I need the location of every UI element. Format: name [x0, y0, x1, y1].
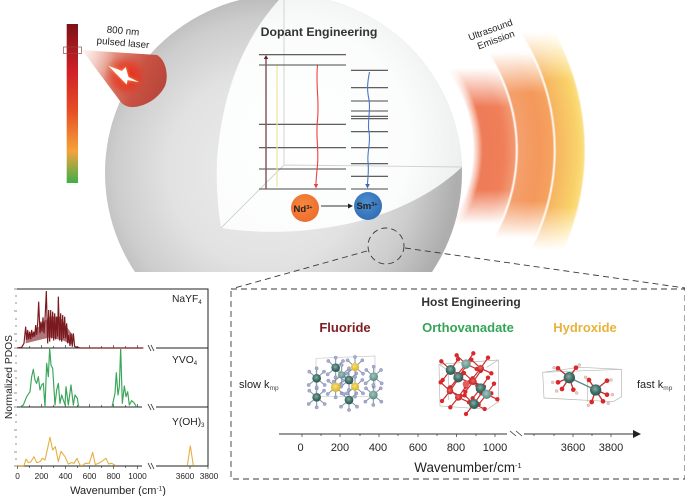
laser label — [96, 25, 150, 51]
PDOS chart — [4, 289, 219, 496]
laser label: 800 nm — [106, 25, 140, 38]
energy levels: Sm — [351, 70, 388, 189]
chart frame — [14, 289, 208, 469]
Y(OH)3 trace — [17, 437, 193, 466]
host engineering panel — [231, 289, 685, 479]
laser label: pulsed laser — [96, 36, 150, 51]
host class labels — [319, 320, 617, 335]
excitation arrow — [264, 55, 268, 189]
axis tick labels: 3800 — [599, 442, 623, 454]
red wavy relaxation arrow — [314, 66, 318, 188]
compound labels: Y(OH) — [172, 417, 201, 428]
sphere — [105, 0, 462, 272]
Sm ion: Sm — [356, 201, 371, 212]
x tick labels: 200 — [35, 471, 49, 481]
axis tick labels: 800 — [447, 442, 465, 454]
slow label: slow k — [239, 379, 270, 391]
wavenumber axis — [279, 430, 641, 475]
yellow transition — [276, 66, 278, 187]
ultrasound emission waves — [466, 20, 570, 280]
orthovanadate crystal — [438, 351, 499, 416]
fast label: mp — [663, 385, 673, 392]
lightning bolt — [108, 66, 139, 84]
axis tick labels: 0 — [297, 442, 304, 454]
Nd ion: 3+ — [306, 205, 312, 211]
gradient bar — [64, 24, 82, 183]
ultrasound label: Emission — [476, 29, 516, 52]
axis tick labels: 400 — [369, 442, 387, 454]
x tick labels: 800 — [107, 471, 121, 481]
x tick labels: 400 — [59, 471, 73, 481]
axis tick labels: 3600 — [561, 442, 585, 454]
Sm ion — [354, 192, 382, 220]
Nd ion: Nd — [294, 204, 306, 215]
Nd ion — [291, 194, 319, 222]
hydroxide crystal — [543, 363, 622, 407]
axis tick labels: 200 — [331, 442, 349, 454]
fluoride crystal — [307, 355, 383, 412]
x tick labels: 600 — [83, 471, 97, 481]
compound labels: 4 — [198, 300, 202, 306]
x tick labels: 3800 — [200, 471, 219, 481]
laser beam — [82, 50, 167, 107]
energy levels: Nd — [259, 55, 346, 189]
compound labels: 3 — [201, 423, 205, 429]
axis title: -1 — [515, 461, 522, 470]
slow label: mp — [270, 385, 279, 392]
y axis title: Normalized PDOS — [4, 335, 15, 419]
Sm ion: 3+ — [371, 202, 378, 208]
cut-away window — [217, 0, 462, 232]
compound labels: YVO — [172, 355, 194, 366]
compound labels — [172, 294, 205, 429]
x tick labels: 3600 — [176, 471, 195, 481]
fast label: fast k — [637, 379, 663, 391]
axis tick labels: 600 — [409, 442, 427, 454]
host class labels: Hydroxide — [553, 320, 617, 335]
NaYF4 trace — [17, 291, 143, 348]
x tick labels: 1000 — [128, 471, 147, 481]
ultrasound label: Ultrasound — [467, 17, 514, 44]
axis tick labels: 1000 — [483, 442, 507, 454]
energy transfer arrow — [321, 204, 353, 208]
host class labels: Orthovanadate — [422, 320, 514, 335]
inner axes — [221, 0, 462, 228]
x tick labels — [15, 471, 219, 481]
x axis title: -1 — [156, 486, 163, 492]
x tick labels: 0 — [15, 471, 20, 481]
dopant engineering title: Dopant Engineering — [261, 25, 377, 39]
compound labels: NaYF — [172, 294, 198, 305]
host class labels: Fluoride — [319, 320, 371, 335]
blue wavy relaxation arrow — [365, 72, 370, 188]
zoom circle and connectors — [231, 228, 685, 289]
panel title: Host Engineering — [421, 295, 521, 309]
axis tick labels — [297, 442, 623, 454]
compound labels: 4 — [194, 361, 198, 367]
axis title: Wavenumber/cm — [414, 460, 515, 475]
YVO4 trace — [20, 348, 137, 407]
